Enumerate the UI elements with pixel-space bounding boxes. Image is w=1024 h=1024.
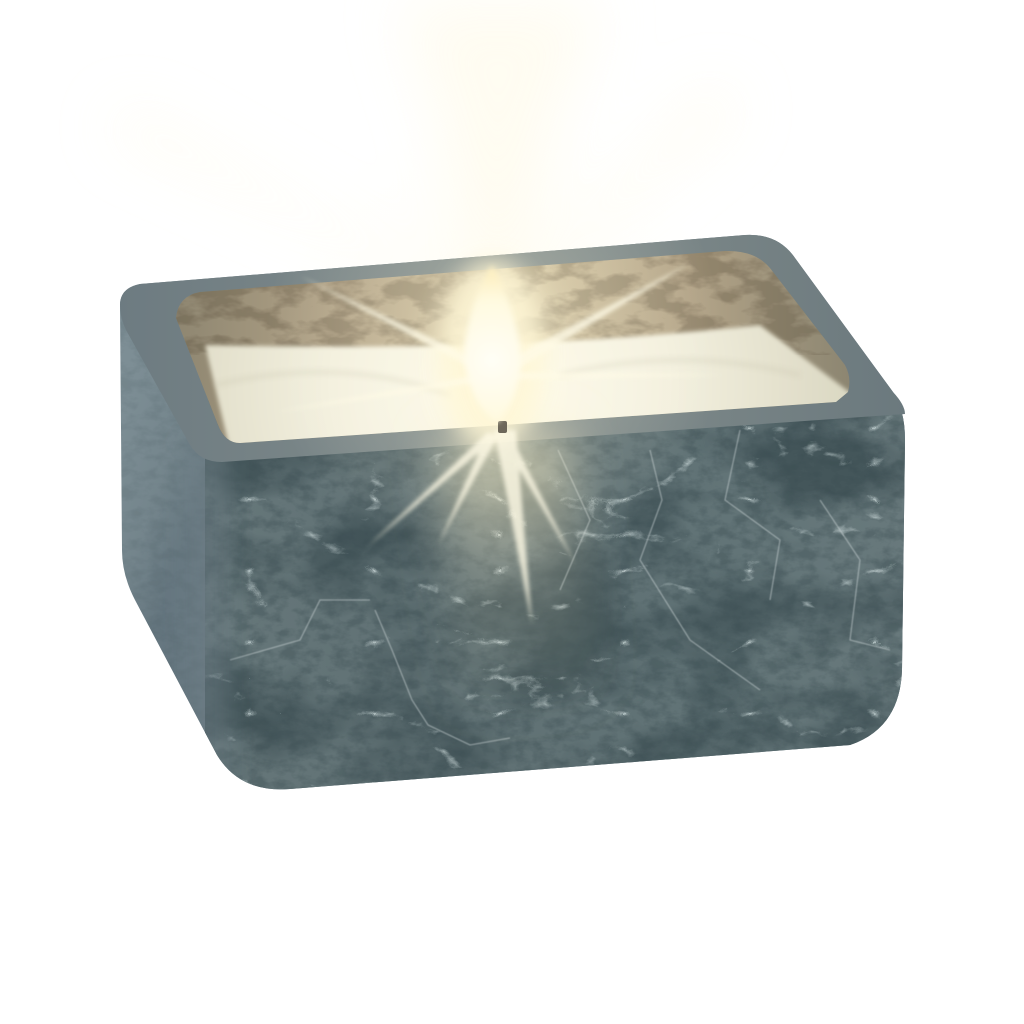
inner wall (170, 245, 860, 445)
wax surface (205, 325, 860, 450)
marble vein lines (230, 430, 890, 745)
candle interior (170, 245, 860, 450)
wick (498, 421, 507, 433)
illustration: lit candle in square marble holder (120, 6, 905, 790)
holder body silhouette (120, 235, 905, 789)
wax swirl (291, 358, 708, 384)
front face and marble texture (115, 280, 910, 800)
white veins (205, 400, 910, 800)
fine mottling (205, 400, 910, 800)
front glow (440, 430, 600, 720)
halo (265, 110, 725, 570)
candle holder (115, 235, 910, 800)
front face (205, 405, 910, 800)
flame (464, 265, 521, 423)
crumpled wall texture (176, 251, 829, 355)
background light rays (110, 0, 740, 310)
flame glow (265, 110, 725, 720)
corner blend between side and front (187, 458, 234, 761)
star rays (275, 262, 725, 625)
flame aura (440, 260, 544, 450)
dark patches (205, 400, 910, 800)
side mottling (120, 322, 160, 546)
rim (120, 235, 905, 462)
